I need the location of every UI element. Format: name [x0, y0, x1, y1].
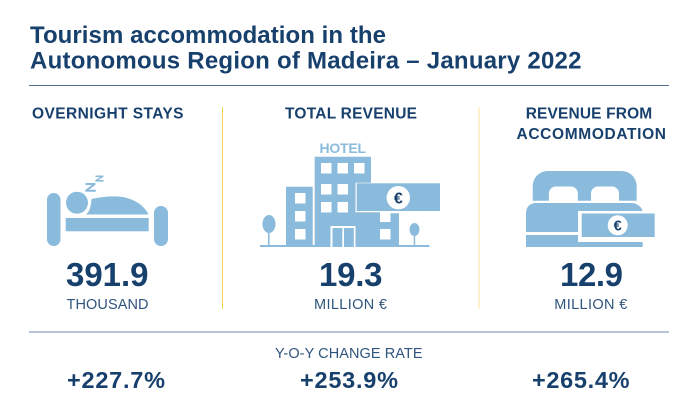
section: year-on-year change rates [67, 346, 630, 393]
title: Tourism accommodation in the [30, 22, 386, 49]
change: overnight stays: +227.7% [67, 367, 165, 393]
unit: million euro: MILLION € [554, 297, 627, 313]
unit: million euro: MILLION € [314, 297, 387, 313]
value: 12.9: 12.9 [560, 256, 623, 293]
heading: revenue from accommodation: ACCOMMODATION [516, 126, 666, 143]
icon: double bed with euro banknote [526, 171, 657, 247]
heading: revenue from accommodation [516, 106, 666, 143]
title [30, 22, 582, 74]
icon: hotel with euro banknote: € [394, 190, 403, 208]
title: Autonomous Region of Madeira – January 2022 [30, 47, 582, 74]
panel: revenue from accommodation [516, 106, 666, 313]
icon: hotel with euro banknote: HOTEL [320, 140, 366, 156]
panel: overnight stays [32, 106, 184, 313]
value: 391.9: 391.9 [66, 256, 148, 293]
label: y-o-y change rate: Y-O-Y CHANGE RATE [275, 346, 423, 362]
icon: hotel with euro banknote [260, 140, 440, 247]
change: total revenue: +253.9% [300, 367, 398, 393]
unit: thousand: THOUSAND [66, 297, 148, 313]
icon: sleeping person in bed [47, 176, 168, 246]
heading: total revenue: TOTAL REVENUE [285, 106, 417, 123]
change: revenue from accommodation: +265.4% [532, 367, 630, 393]
heading: revenue from accommodation: REVENUE FROM [526, 106, 652, 123]
value: 19.3: 19.3 [319, 256, 382, 293]
panel: total revenue [260, 106, 440, 313]
icon: double bed with euro banknote: € [614, 218, 622, 234]
heading: overnight stays: OVERNIGHT STAYS [32, 106, 184, 123]
